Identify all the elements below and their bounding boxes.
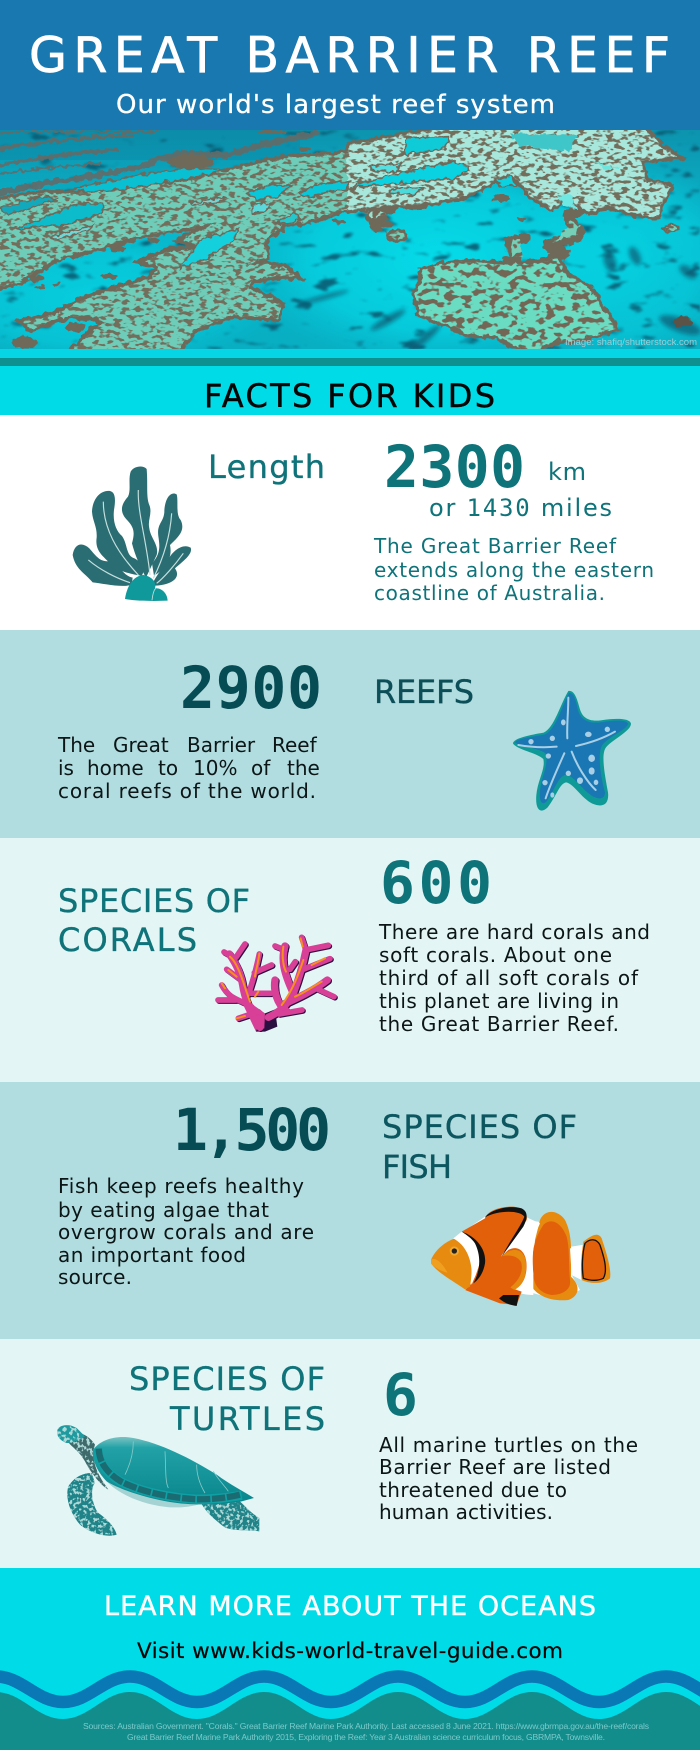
text: fish description: overgrow corals and are: [58, 1220, 314, 1244]
text: reefs description: of: [251, 756, 271, 780]
link text: Visit www.kids-world-travel-guide.com: [137, 1639, 563, 1664]
text: reefs description: Barrier: [187, 733, 256, 757]
wave: blue band: [0, 1676, 700, 1702]
text: reefs description: Great: [113, 733, 169, 757]
footer: [0, 1568, 700, 1750]
text: length description: extends along the eastern: [374, 558, 654, 582]
reef: lagoons: [0, 133, 620, 269]
text: fish description: [58, 1174, 314, 1289]
text: length description: The Great Barrier Reef: [373, 534, 617, 558]
number: 2300 km: or 1430 miles: [429, 494, 612, 522]
label: species of turtles: TURTLES: [169, 1400, 325, 1438]
text: reefs description: 10%: [193, 756, 237, 780]
label: length: Length: [208, 448, 325, 486]
icon: seaweed: [73, 466, 191, 601]
heading: learn more: LEARN MORE ABOUT THE OCEANS: [104, 1591, 596, 1622]
text: turtles description: [379, 1433, 638, 1524]
sources: Great Barrier Reef Marine Park Authority 2015, Exploring the Reef: Year 3 Australian science curriculum focus, GBRMPA, Townsville.: [127, 1732, 605, 1742]
number: 2300 km: 2300: [384, 433, 525, 501]
label: species of corals: [58, 882, 250, 959]
label: species of corals: SPECIES OF: [58, 882, 250, 920]
subtitle: Our world's largest reef system: [116, 90, 555, 120]
text: reefs description: [57, 733, 320, 803]
number: 1,500: 1,500: [173, 1096, 331, 1164]
text: fish description: an important food: [58, 1243, 246, 1267]
text: reefs description: Reef: [272, 733, 318, 757]
text: corals description: There are hard corals and: [378, 920, 650, 944]
text: fish description: source.: [58, 1265, 132, 1289]
text: turtles description: human activities.: [379, 1500, 553, 1524]
text: reefs description: The: [57, 733, 95, 757]
banner: facts for kids: FACTS FOR KIDS: [204, 377, 495, 415]
text: turtles description: Barrier Reef are listed: [379, 1455, 611, 1479]
panel: fish: [0, 1082, 700, 1339]
number: 2900: 2900: [180, 654, 322, 722]
label: species of fish: SPECIES OF: [382, 1108, 577, 1146]
banner: facts for kids: [0, 349, 700, 415]
wave: teal sea: [0, 1692, 700, 1750]
text: reefs description: home: [87, 756, 144, 780]
header band: [0, 0, 700, 130]
label: species of fish: [382, 1108, 577, 1186]
number: 600: 600: [380, 849, 492, 917]
text: reefs description: to: [158, 756, 178, 780]
text: fish description: by eating algae that: [58, 1198, 269, 1222]
label: species of turtles: [129, 1360, 325, 1438]
text: length description: [373, 534, 654, 605]
text: corals description: [378, 920, 650, 1036]
text: corals description: this planet are living in: [379, 989, 619, 1013]
text: corals description: the Great Barrier Reef.: [379, 1012, 619, 1036]
text: reefs description: the: [287, 756, 320, 780]
photo credit: Image: shafiq/shutterstock.com: [565, 337, 697, 348]
icon: sea turtle: [57, 1425, 259, 1536]
text: turtles description: All marine turtles on the: [379, 1433, 638, 1457]
number: 2300 km: [384, 433, 612, 522]
label: reefs: REEFS: [374, 673, 474, 711]
icon: clownfish: [431, 1207, 610, 1306]
text: length description: coastline of Australia.: [374, 581, 605, 605]
reef: brown outlines: [0, 128, 693, 352]
panel: length: [0, 415, 700, 630]
panel: corals: [0, 838, 700, 1082]
label: species of fish: FISH: [382, 1148, 452, 1186]
icon: starfish: [513, 691, 631, 811]
label: species of corals: CORALS: [58, 921, 197, 959]
sources: [83, 1721, 649, 1742]
panel: turtles: [0, 1339, 700, 1568]
text: reefs description: coral reefs of the world.: [58, 779, 316, 803]
text: fish description: Fish keep reefs healthy: [58, 1174, 304, 1198]
label: species of turtles: SPECIES OF: [129, 1360, 325, 1398]
panel: reefs: [0, 630, 700, 838]
text: corals description: soft corals. About one: [379, 943, 612, 967]
title: GREAT BARRIER REEF: [29, 27, 670, 84]
text: corals description: third of all soft corals of: [379, 966, 639, 990]
sources: Sources: Australian Government. "Corals." Great Barrier Reef Marine Park Authority. Last accessed 8 June 2021. https://www.gbrmpa.gov.au/the-reef/corals: [83, 1721, 649, 1731]
reef: mottled teal interior: [0, 128, 677, 352]
number: 2300 km: km: [548, 458, 586, 486]
text: turtles description: threatened due to: [379, 1478, 567, 1502]
icon: coral: [218, 937, 335, 1032]
number: 6: 6: [383, 1361, 418, 1429]
text: reefs description: is: [58, 756, 74, 780]
